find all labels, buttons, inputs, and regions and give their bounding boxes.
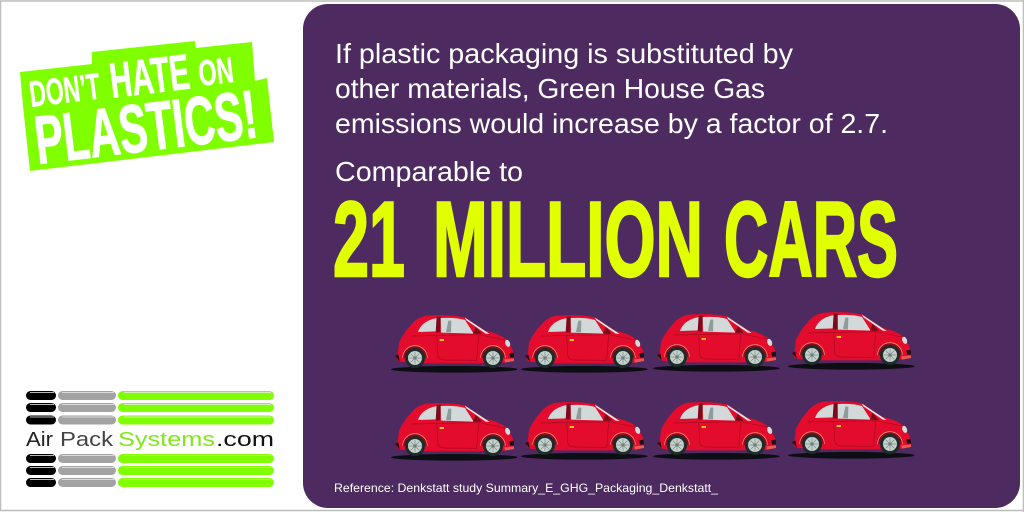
logo wordmark: .com xyxy=(216,429,274,451)
car 2 xyxy=(521,315,648,373)
panel: purple main xyxy=(303,4,1020,508)
logo bars: bottom group xyxy=(26,454,274,487)
statement text: If plastic packaging is substituted by xyxy=(335,38,793,69)
car 1 xyxy=(391,315,518,373)
logo wordmark: Air xyxy=(26,429,53,451)
car 8 xyxy=(788,401,915,459)
statement text: other materials, Green House Gas xyxy=(335,73,765,104)
car 6 xyxy=(521,402,648,460)
badge: don't hate on plastics: HATE xyxy=(107,44,193,109)
car 4 xyxy=(788,312,915,370)
badge: don't hate on plastics: DON’T xyxy=(27,66,103,115)
logo: AirPackSystems.com xyxy=(26,391,274,487)
headline: 21 million cars: 21 xyxy=(333,179,405,299)
logo wordmark xyxy=(26,429,274,451)
car grid xyxy=(391,312,915,461)
comparable to: Comparable to xyxy=(335,156,523,187)
reference note: Reference: Denkstatt study Summary_E_GHG_Packaging_Denkstatt_ xyxy=(334,481,718,495)
logo bars: top group xyxy=(26,391,274,424)
car 5 xyxy=(391,403,518,461)
logo wordmark: Systems xyxy=(118,429,215,451)
logo wordmark: Pack xyxy=(60,429,114,451)
statement text: emissions would increase by a factor of 2.7. xyxy=(335,108,888,139)
statement text xyxy=(335,38,888,139)
car 3 xyxy=(653,314,780,372)
headline: 21 million cars: MILLION xyxy=(433,179,703,299)
badge: don't hate on plastics: PLASTICS! xyxy=(31,76,261,179)
badge: don't hate on plastics: ON xyxy=(196,49,236,94)
headline: 21 million cars: CARS xyxy=(724,179,898,299)
badge: don't hate on plastics xyxy=(20,41,274,179)
car 7 xyxy=(653,402,780,460)
